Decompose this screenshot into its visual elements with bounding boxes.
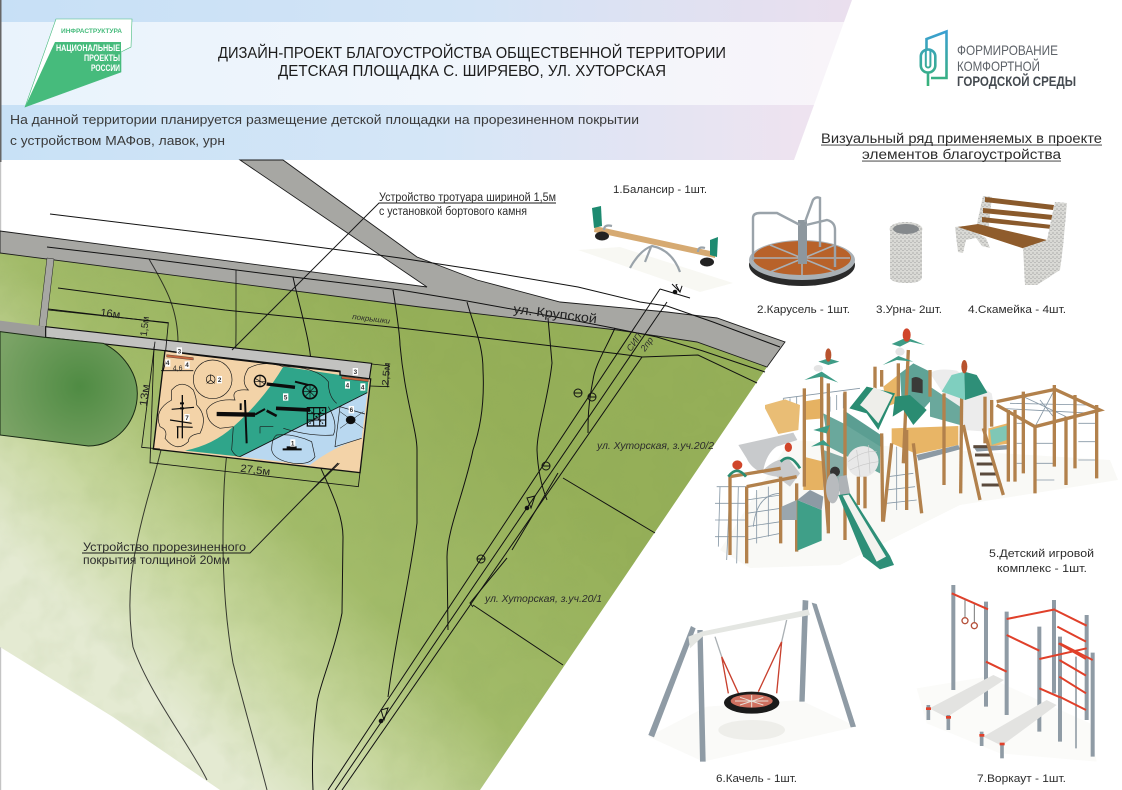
item 5 caption: комплекс - 1шт. [997,563,1087,575]
map street labels: ул. Хуторская, з.уч.20/2 [596,440,714,452]
map street labels: ул. Крупской [513,301,598,326]
utility lines [328,284,690,790]
item 2: carousel [749,197,855,316]
equipment on plan [170,375,363,449]
plan number labels: 7 [185,415,189,422]
staircase [963,425,1003,500]
item 7: workout [917,585,1097,785]
description text [10,112,639,148]
palm and roof leaves [804,337,927,447]
white tunnel and roof [930,369,993,432]
title: ДЕТСКАЯ ПЛОЩАДКА С. ШИРЯЕВО, УЛ. ХУТОРСКАЯ [278,63,666,80]
teal wall panels [823,413,880,473]
item 3: urn: 3.Урна- 2шт. [876,304,942,316]
logo: national projects: РОССИИ [91,63,120,74]
plan number labels: 3 [178,348,182,355]
item 6: swing [648,600,857,785]
callout: rubber surface: покрытия толщиной 20мм [83,555,230,567]
item 5: play complex [715,328,1118,575]
floor beams [917,445,960,461]
item 4: bench: 4.Скамейка - 4шт. [968,304,1066,316]
map street labels: покрышки [352,312,391,326]
dimension labels: 1,5м [139,316,152,337]
description text: На данной территории планируется размещение детской площадки на прорезиненном покрытии [10,112,639,127]
dimension labels [138,316,393,478]
plan number labels: 1 [291,440,295,447]
logo: national projects [25,19,132,107]
logo: national projects: ИНФРАСТРУКТУРА [61,28,122,35]
item 1: balancer: 1.Балансир - 1шт. [613,184,707,196]
logo: comfortable urban environment: ГОРОДСКОЙ СРЕДЫ [957,72,1076,89]
straight slide [838,493,894,569]
logo: comfortable urban environment [921,32,1076,89]
plan number labels: 4 [185,362,189,369]
dimension labels: 27,5м [240,463,271,478]
map street labels: СИП [624,331,644,353]
map street labels [352,301,714,605]
title: ДИЗАЙН-ПРОЕКТ БЛАГОУСТРОЙСТВА ОБЩЕСТВЕННОЙ ТЕРРИТОРИИ [218,44,726,62]
ground shadow [720,440,1118,568]
header background bands [0,0,852,790]
item 7: workout: 7.Воркаут - 1шт. [977,773,1066,785]
umbrella roof [942,372,965,400]
wooden posts [730,350,1100,563]
plan number labels: 4 [361,384,365,391]
plan number labels: 6 [350,407,354,414]
play tower [797,500,822,551]
item 1: balancer [578,184,733,292]
plan number labels: 4 [166,360,170,367]
plan number labels: 2 [218,377,222,384]
birds [732,328,967,470]
dimension: 16 m: 16м [100,307,121,321]
contour lines [47,214,780,790]
dimension labels: 2,5м [380,362,393,386]
callout: sidewalk: с установкой бортового камня [379,206,527,218]
item 4: bench [955,196,1067,316]
plan number labels [165,347,365,447]
map street labels: 2пр [638,335,655,354]
road: Krupskaya street [0,160,785,367]
utility markers [379,280,684,723]
plan dimensions [48,310,390,487]
callout: rubber surface: Устройство прорезиненного [83,542,246,554]
item 5 caption [989,548,1094,575]
green oval lawn [0,332,137,446]
climbing nets [715,388,1097,563]
plan number labels: 3 [354,369,358,376]
benches on plan [167,355,368,382]
site plan map [0,160,785,790]
heading: visual row: элементов благоустройства [862,146,1061,162]
item 2: carousel: 2.Карусель - 1шт. [757,304,850,316]
item 6: swing: 6.Качель - 1шт. [716,773,797,785]
logo: national projects: НАЦИОНАЛЬНЫЕ [56,43,120,54]
plan number labels: 4 [346,382,350,389]
heading: visual row [821,130,1102,162]
dimension labels: 13м [138,384,152,407]
plan number labels: 4,6 [173,365,183,372]
playground plan [0,310,393,500]
map street labels: ул. Хуторская, з.уч.20/1 [484,593,602,605]
logo: comfortable urban environment: ФОРМИРОВАНИЕ [957,42,1058,58]
yellow panels [765,399,800,434]
callout: sidewalk: Устройство тротуара шириной 1,5м [379,192,556,204]
description text: с устройством МАФов, лавок, урн [10,133,225,148]
callout: sidewalk [232,192,556,350]
dimension: 16 m [48,307,168,323]
white tube tunnel [841,440,884,483]
title [218,44,726,80]
logo: comfortable urban environment: КОМФОРТНОЙ [957,57,1040,74]
item 5 caption: 5.Детский игровой [989,548,1094,560]
logo: national projects: ПРОЕКТЫ [84,53,120,64]
callout: rubber surface [82,463,338,567]
item 3: urn [876,222,942,316]
plan number labels: 5 [284,394,288,401]
footpath [0,321,372,379]
grass area [0,250,780,790]
heading: visual row: Визуальный ряд применяемых в проекте [821,130,1102,146]
spiral slide [738,433,800,487]
playground surface [153,351,371,500]
